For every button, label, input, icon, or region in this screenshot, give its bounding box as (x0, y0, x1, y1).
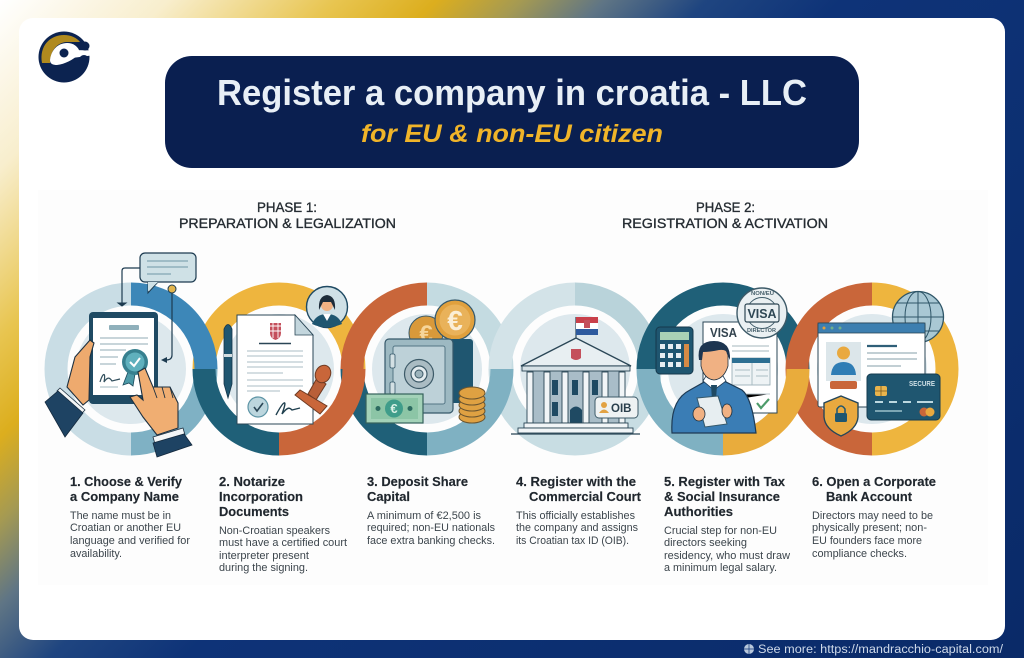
step 2 text: Incorporation (219, 489, 303, 504)
step 3 text: required; non-EU nationals (367, 522, 495, 534)
icon: bank account window with globe, card and shield: SECURE (909, 381, 935, 388)
phase 2 heading (622, 200, 828, 231)
step 5 text: Authorities (664, 504, 733, 519)
icon: director with visa document, calculator and stamp: VISA (748, 306, 777, 321)
step 6 text: Directors may need to be (812, 510, 933, 522)
content panel (38, 190, 988, 585)
step 1 text: 1. Choose & Verify (70, 474, 183, 489)
icon: safe with coins and banknote: € (419, 321, 433, 348)
step 3 text: A minimum of €2,500 is (367, 510, 481, 522)
interlocking rings (56, 294, 947, 444)
icon: director with visa document, calculator and stamp: NON/EU (751, 291, 774, 297)
step 2 text: Non-Croatian speakers (219, 525, 330, 537)
step 4 text: This officially establishes (516, 510, 635, 522)
step 6 text: compliance checks. (812, 548, 907, 560)
step 5 text: & Social Insurance (664, 489, 780, 504)
phase 1 heading: PREPARATION & LEGALIZATION (179, 216, 396, 231)
icon: director with visa document, calculator and stamp: DIRECTOR (747, 328, 776, 334)
phase 1 heading: PHASE 1: (257, 200, 317, 215)
step 5 text: Crucial step for non-EU (664, 525, 777, 537)
step 2 text: Documents (219, 504, 289, 519)
step 4 text: its Croatian tax ID (OIB). (516, 535, 629, 547)
step 4 text: 4. Register with the (516, 474, 636, 489)
step 4 text (516, 474, 642, 547)
icon: director with visa document, calculator and stamp: VISA (710, 325, 738, 340)
icon: safe with coins and banknote: € (390, 401, 398, 416)
step 6 text (812, 474, 936, 560)
step 4 text: Commercial Court (529, 489, 642, 504)
icon: safe with coins and banknote: € (447, 305, 463, 336)
phase 2 heading: PHASE 2: (696, 200, 755, 215)
inner discs (76, 314, 927, 424)
icon: notarized document with pen, stamp and notary (224, 286, 348, 424)
icon: safe with coins and banknote (366, 300, 485, 423)
title banner (165, 56, 859, 168)
step 1 text: availability. (70, 548, 122, 560)
step 6 text: physically present; non- (812, 522, 927, 534)
step 5 text: 5. Register with Tax (664, 474, 786, 489)
step 1 text (70, 474, 190, 560)
phase 1 heading (179, 200, 396, 231)
subtitle: for EU & non-EU citizen (361, 120, 663, 148)
step 4 text: the company and assigns (516, 522, 638, 534)
step 5 text (664, 474, 790, 574)
icon: commercial court building with flag and OIB tag (511, 317, 640, 434)
step 1 text: language and verified for (70, 535, 190, 547)
icon: director with visa document, calculator and stamp (656, 288, 787, 433)
step 2 text: must have a certified court (219, 537, 347, 549)
step 2 text (219, 474, 347, 574)
icon: bank account window with globe, card and shield (818, 292, 944, 436)
icon: tablet with hands and speech bubble (45, 253, 196, 457)
step 3 text: Capital (367, 489, 410, 504)
footer link: See more: https://mandracchio-capital.com/ (758, 644, 1004, 656)
step 3 text: 3. Deposit Share (367, 474, 468, 489)
logo (38, 32, 95, 82)
step 5 text: a minimum legal salary. (664, 562, 777, 574)
step 6 text: 6. Open a Corporate (812, 474, 936, 489)
step 2 text: during the signing. (219, 562, 308, 574)
step 1 text: The name must be in (70, 510, 171, 522)
step 2 text: interpreter present (219, 550, 309, 562)
step 3 text (367, 474, 495, 547)
step 6 text: Bank Account (826, 489, 913, 504)
step 1 text: a Company Name (70, 489, 179, 504)
title: Register a company in croatia - LLC (217, 72, 807, 113)
step 6 text: EU founders face more (812, 535, 922, 547)
icon: commercial court building with flag and OIB tag: OIB (611, 403, 631, 415)
step 2 text: 2. Notarize (219, 474, 285, 489)
step 1 text: Croatian or another EU (70, 522, 181, 534)
step 5 text: residency, who must draw (664, 550, 790, 562)
phase 2 heading: REGISTRATION & ACTIVATION (622, 216, 828, 231)
step 3 text: face extra banking checks. (367, 535, 495, 547)
step 5 text: directors seeking (664, 537, 747, 549)
